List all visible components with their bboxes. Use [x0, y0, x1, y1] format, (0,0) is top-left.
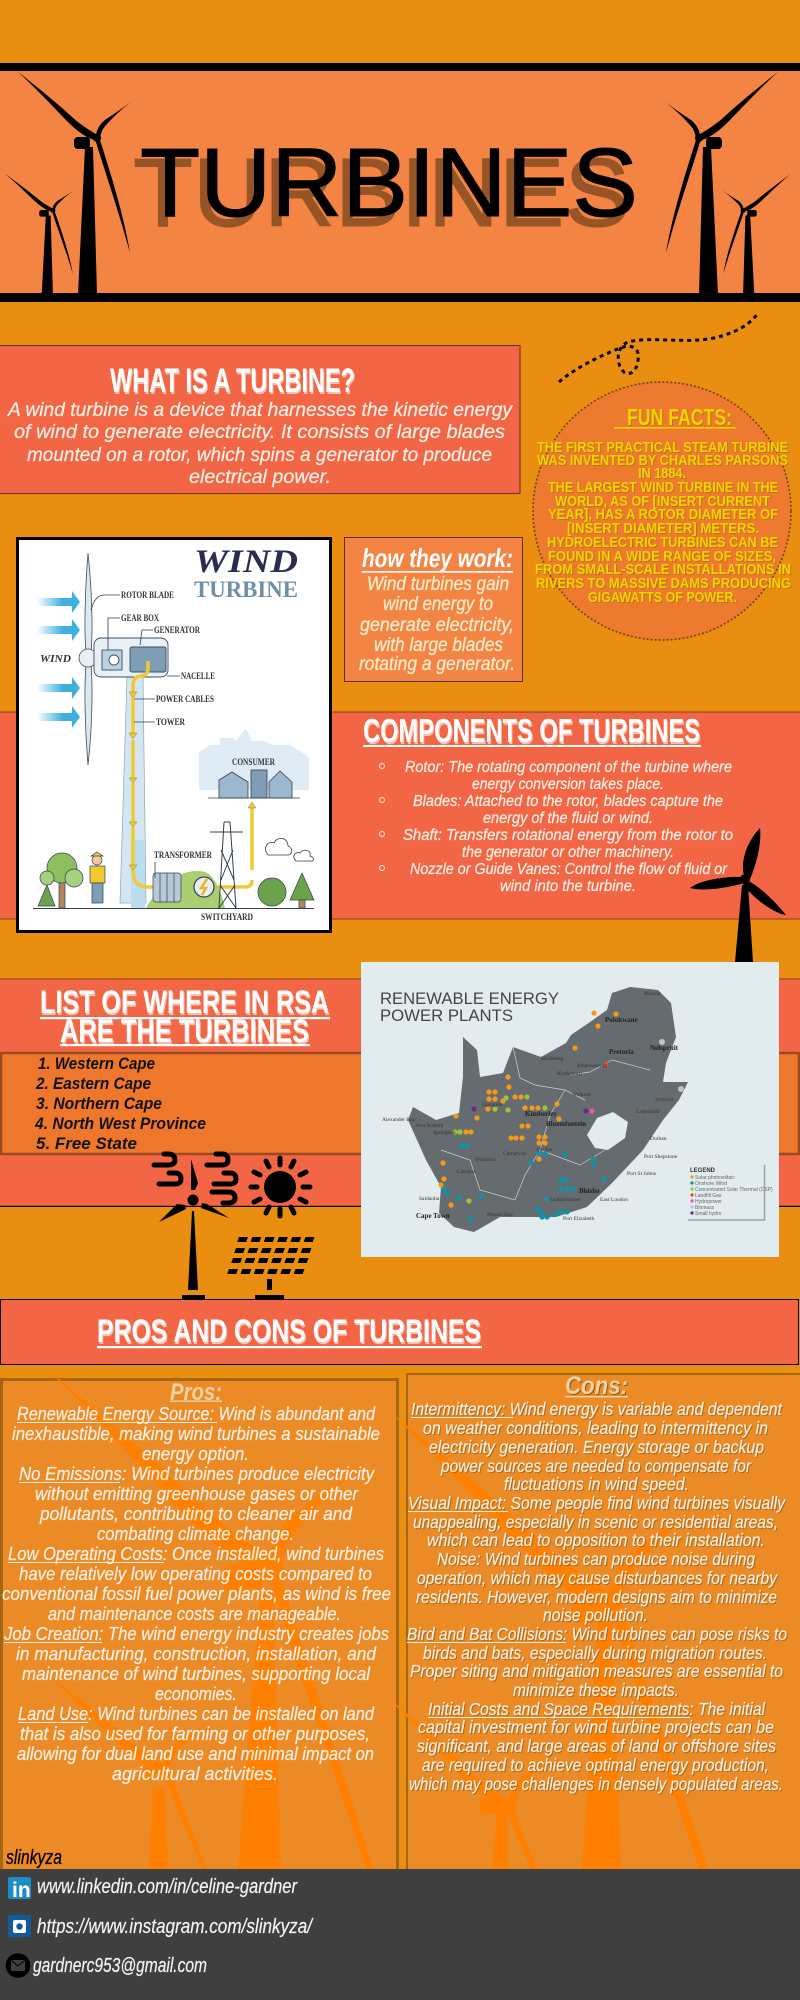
consumer city — [199, 728, 309, 790]
rotor blades — [79, 553, 97, 765]
diagram: wind turbine — [18, 538, 330, 932]
fun facts text: [INSERT DIAMETER] METERS. — [567, 520, 759, 537]
diagram labels: SWITCHYARD — [201, 912, 253, 922]
icon: small left turbine — [5, 174, 74, 297]
panel: footer contacts — [0, 1869, 800, 2000]
houses — [208, 770, 300, 798]
list box — [1, 1053, 799, 1154]
pros list: agricultural activities. — [112, 1764, 278, 1784]
decorative dashed flight path arrow — [559, 313, 758, 382]
city labels: Mossel Bay — [487, 1212, 513, 1218]
component list: the generator or other machinery. — [462, 844, 674, 861]
heading: pros and cons: PROS AND CONS OF TURBINES — [97, 1313, 481, 1349]
city labels: Klerksdorp — [557, 1071, 582, 1077]
map of South Africa — [408, 987, 688, 1232]
diagram title: TURBINE — [194, 577, 298, 602]
map legend: Small hydro — [695, 1211, 722, 1217]
definition text — [7, 400, 514, 488]
renewable energy map — [361, 962, 779, 1257]
cons list: Noise: Wind turbines can produce noise during — [437, 1549, 755, 1569]
icon: linkedin: in — [12, 1879, 31, 1902]
pros list: allowing for dual land use and minimal impact on — [17, 1744, 374, 1764]
Lesotho — [587, 1112, 628, 1150]
cons list: minimize these impacts. — [513, 1680, 679, 1700]
pros text — [2, 1379, 391, 1784]
cons list: which can lead to opposition to their installation. — [427, 1530, 765, 1550]
heading: fun facts: FUN FACTS: — [627, 404, 732, 430]
panel: what is a turbine — [0, 346, 520, 494]
city labels: Bhisho — [579, 1187, 600, 1195]
province list: 4. North West Province — [34, 1114, 206, 1133]
wind swirls — [154, 1154, 236, 1203]
pros list: energy option. — [142, 1444, 249, 1464]
pylon — [210, 822, 243, 908]
solar panel — [228, 1240, 314, 1272]
icon: email — [6, 1953, 30, 1978]
city labels: Musina — [644, 991, 661, 997]
yellow arrow heads — [129, 692, 256, 870]
city labels: East London — [600, 1197, 628, 1203]
transformer — [153, 873, 181, 902]
heading: list of where — [40, 984, 330, 1049]
component list: Nozzle or Guide Vanes: Control the flow of fluid or — [410, 861, 728, 878]
component list: energy of the fluid or wind. — [483, 810, 653, 827]
cons list: capital investment for wind turbine projects can be — [418, 1717, 774, 1737]
definition text: mounted on a rotor, which spins a generator to produce — [27, 445, 492, 466]
panel: how they work — [344, 538, 522, 682]
watermark: pros small turbine — [41, 1669, 219, 1870]
pros list: Low Operating Costs: Once installed, wind turbines — [8, 1544, 384, 1564]
city labels: Carnarvon — [503, 1151, 526, 1157]
fun facts text — [535, 439, 791, 606]
author signature: slinkyza — [6, 1847, 62, 1869]
heading: pros: Pros: — [170, 1379, 222, 1406]
instagram address: https://www.instagram.com/slinkyza/ — [37, 1916, 314, 1938]
watermark: cons small turbine — [383, 1693, 566, 1870]
icon: instagram — [8, 1915, 31, 1937]
component list: Blades: Attached to the rotor, blades capture the — [413, 793, 723, 810]
panel: pros — [2, 1380, 398, 1874]
city labels: Mahikeng — [541, 1056, 564, 1062]
pros list: have relatively low operating costs compared to — [19, 1564, 372, 1584]
panel: pros and cons heading — [0, 1300, 798, 1364]
city labels: Springbok — [433, 1130, 456, 1136]
power cable arrows — [133, 661, 252, 887]
city labels: Johannesburg — [577, 1063, 607, 1069]
nacelle — [94, 638, 168, 677]
pros list: pollutants, contributing to cleaner air and — [39, 1504, 353, 1524]
small windmill — [159, 1159, 229, 1222]
heading: list of where: LIST OF WHERE IN RSA — [40, 984, 329, 1020]
diagram labels: NACELLE — [181, 671, 215, 681]
diagram title — [194, 544, 298, 602]
heading: how they work: how they work: — [362, 543, 513, 573]
city labels: Calvinia — [457, 1169, 476, 1175]
title banner — [0, 63, 800, 302]
city labels: Saldanha — [419, 1196, 440, 1202]
hill — [146, 871, 225, 908]
component bullets — [380, 764, 384, 870]
watermark turbines — [41, 1367, 712, 1870]
panel: list of where in RSA — [0, 979, 800, 1206]
city labels: Port Shepstone — [644, 1154, 678, 1160]
pros list — [2, 1404, 391, 1784]
panel: fun facts — [533, 382, 791, 640]
how they work text: rotating a generator. — [359, 654, 515, 675]
diagram labels: GENERATOR — [154, 625, 200, 635]
pros underlines — [4, 1422, 217, 1722]
diagram labels: ROTOR BLADE — [121, 590, 174, 600]
title shadow: TURBINES — [133, 138, 630, 247]
component list: Shaft: Transfers rotational energy from the rotor to — [403, 827, 733, 844]
city labels — [382, 991, 679, 1222]
sun — [264, 1171, 296, 1203]
component list: wind into the turbine. — [500, 878, 636, 895]
diagram labels: WIND — [40, 653, 71, 665]
cons list: Initial Costs and Space Requirements: The initial — [428, 1699, 766, 1719]
cons list: birds and bats, especially during migration routes. — [423, 1643, 767, 1663]
how they work text: wind energy to — [383, 594, 493, 615]
cons text — [407, 1372, 787, 1794]
diagram labels: TRANSFORMER — [154, 850, 212, 860]
linkedin address: www.linkedin.com/in/celine-gardner — [37, 1876, 298, 1898]
pros list: in manufacturing, construction, installation, and — [16, 1644, 377, 1664]
city labels: Upington — [482, 1102, 503, 1108]
how they work text: with large blades — [374, 635, 503, 656]
city labels: Williston — [475, 1157, 496, 1163]
email address: gardnerc953@gmail.com — [33, 1955, 207, 1977]
switch — [194, 877, 214, 897]
ground — [33, 908, 314, 910]
map dots — [438, 1010, 619, 1208]
heading: what is a turbine: WHAT IS A TURBINE? — [110, 362, 355, 400]
panel: cons — [407, 1374, 800, 1874]
cons list — [407, 1399, 787, 1794]
pros list: No Emissions: Wind turbines produce electricity — [19, 1464, 375, 1484]
map legend: Onshore Wind — [695, 1181, 727, 1187]
diagram labels: GEAR BOX — [121, 613, 159, 623]
province list: 5. Free State — [36, 1134, 137, 1153]
map legend — [688, 1165, 773, 1220]
fun facts text: IN 1884. — [638, 465, 686, 482]
pros list: combating climate change. — [97, 1524, 294, 1544]
icon: wind and solar energy — [154, 1154, 314, 1300]
title: TURBINES — [140, 128, 638, 237]
city labels: Durban — [650, 1136, 667, 1142]
city labels: Polokwane — [605, 1016, 638, 1024]
map legend: Concentrated Solar Thermal (CSP) — [695, 1187, 773, 1193]
definition text: electrical power. — [189, 467, 331, 488]
city labels: Grahamstown — [550, 1197, 581, 1203]
pros list: conventional fossil fuel power plants, as wind is free — [2, 1584, 391, 1604]
cons list: on weather conditions, leading to intermittency in — [423, 1418, 768, 1438]
diagram leader lines — [91, 595, 180, 878]
city labels: Pretoria — [609, 1048, 634, 1056]
province list: 2. Eastern Cape — [35, 1074, 151, 1093]
component list — [403, 759, 733, 895]
panel: components of turbines — [0, 712, 800, 919]
map legend: Hydropower — [695, 1199, 722, 1205]
solar thermal dots — [452, 1094, 548, 1204]
map title: POWER PLANTS — [380, 1006, 513, 1025]
province list — [34, 1054, 206, 1153]
tower — [120, 677, 146, 903]
how they work text — [359, 574, 515, 675]
diagram title: WIND — [194, 544, 298, 580]
city labels: De Aar — [537, 1147, 553, 1153]
pros list: Job Creation: The wind energy industry creates jobs — [3, 1624, 389, 1644]
city labels: Cape Town — [416, 1212, 450, 1220]
pros list: Renewable Energy Source: Wind is abundant and — [17, 1404, 376, 1424]
map title: RENEWABLE ENERGY — [380, 989, 559, 1008]
component list: Rotor: The rotating component of the turbine where — [405, 759, 732, 776]
watermark: pros large turbine — [45, 1367, 374, 1870]
city labels: Welkom — [572, 1092, 591, 1098]
diagram labels: TOWER — [156, 717, 185, 727]
diagram labels: POWER CABLES — [156, 694, 214, 704]
cons list: electricity generation. Energy storage or backup — [429, 1437, 764, 1457]
city labels: Bloemfontein — [546, 1120, 586, 1128]
city labels: Kimberley — [525, 1110, 557, 1118]
city labels: Port St Johns — [627, 1171, 656, 1177]
icon: large right turbine — [664, 71, 779, 295]
city labels: Ladysmith — [636, 1109, 660, 1115]
icon: small right turbine — [722, 174, 791, 297]
city labels: Nelspruit — [650, 1044, 679, 1052]
city labels: Alexander Bay — [382, 1117, 415, 1123]
pros list: without emitting greenhouse gases or other — [35, 1484, 359, 1504]
pros list: and maintenance costs are manageable. — [48, 1604, 341, 1624]
worker — [90, 852, 105, 903]
watermark: cons large turbine — [384, 1407, 712, 1870]
icon: large left turbine — [17, 71, 132, 295]
icon: black turbine — [690, 828, 786, 962]
cons list: power sources are needed to compensate for — [440, 1456, 752, 1476]
component list: energy conversion takes place. — [472, 776, 664, 793]
fun facts text: WORLD, AS OF [INSERT CURRENT — [555, 493, 770, 510]
cons underlines — [407, 1418, 690, 1718]
map legend: Biomass — [695, 1205, 715, 1211]
heading: list of where: ARE THE TURBINES — [60, 1013, 309, 1049]
tree and fir trees — [38, 853, 314, 908]
city labels: Vryheid — [655, 1097, 673, 1103]
province borders — [441, 1047, 650, 1200]
cons list: fluctuations in wind speed. — [504, 1474, 689, 1494]
pros list: Land Use: Wind turbines can be installed on land — [18, 1704, 375, 1724]
map legend: Landfill Gas — [695, 1193, 722, 1199]
cons list: noise pollution. — [543, 1605, 648, 1625]
how they work text: generate electricity, — [360, 615, 514, 636]
pros list: economies. — [155, 1684, 237, 1704]
map legend: LEGEND — [690, 1168, 716, 1174]
map title — [380, 989, 559, 1025]
pros list: that is also used for farming or other purposes, — [20, 1724, 370, 1744]
pros list: inexhaustible, making wind turbines a sustainable — [12, 1424, 380, 1444]
wind arrows — [37, 591, 80, 728]
how they work text: Wind turbines gain — [367, 574, 509, 595]
definition text: of wind to generate electricity. It consists of large blades — [14, 422, 506, 443]
pros list: maintenance of wind turbines, supporting local — [22, 1664, 371, 1684]
clouds — [266, 838, 313, 861]
other energy dots — [471, 1039, 684, 1114]
diagram labels — [40, 590, 275, 922]
province list: 1. Western Cape — [38, 1054, 155, 1073]
onshore wind dots — [441, 1143, 607, 1222]
city labels: Port Elizabeth — [563, 1216, 595, 1222]
fun facts text: GIGAWATTS OF POWER. — [588, 589, 737, 606]
definition text: A wind turbine is a device that harnesses the kinetic energy — [7, 400, 514, 421]
city labels: Port Nolloth — [416, 1123, 444, 1129]
province list: 3. Northern Cape — [36, 1094, 162, 1113]
map legend: Solar photovoltaic — [695, 1175, 735, 1181]
diagram labels: CONSUMER — [232, 757, 275, 767]
heading: cons: Cons: — [565, 1372, 628, 1400]
